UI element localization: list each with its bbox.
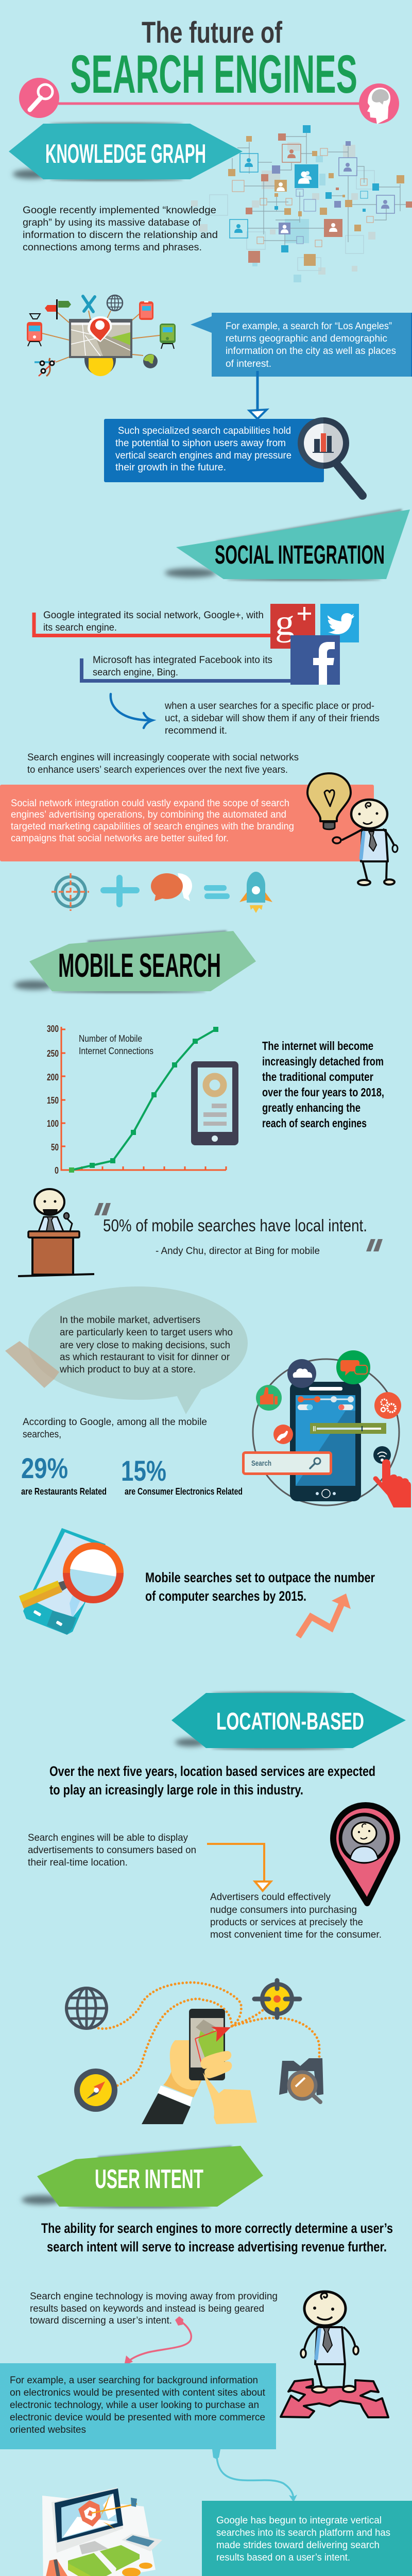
text: sidebar friends recommendation: uct, a sidebar will show them if any of their friends — [165, 713, 380, 724]
quote text: 50% of mobile searches have local intent. — [103, 1216, 367, 1235]
title underline with icons — [19, 78, 399, 124]
illustration: man with light bulb — [307, 773, 398, 885]
text: display ads on real-time location: Search engines will be able to display — [28, 1833, 188, 1843]
stat: 15 percent consumer electronics: 15% — [121, 1454, 166, 1487]
panel: electronics search example — [0, 2363, 276, 2449]
speech bubble: mobile market: which product to buy at a store. — [59, 1364, 196, 1375]
panel: electronics search example: oriented websites — [10, 2425, 86, 2435]
callout: Los Angeles example: For example, a search for “Los Angeles” — [226, 321, 392, 332]
text: internet detached from computer: greatly enhancing the — [262, 1101, 360, 1114]
callout: Los Angeles example: of interest. — [226, 359, 271, 369]
callout: specialized search capabilities — [104, 419, 324, 482]
panel: vertical search integration: made strides toward delivering search — [216, 2540, 380, 2551]
illustration: computer target with money — [42, 2487, 162, 2576]
banner: User Intent — [22, 2146, 263, 2208]
line chart: number of mobile internet connections: Internet Connections — [79, 1046, 153, 1056]
text: advertisers nudge consumers: most convenient time for the consumer. — [210, 1929, 382, 1940]
line chart: number of mobile internet connections: 200 — [47, 1072, 59, 1082]
text block: Google+ integration: Google integrated its social network, Google+, with — [43, 610, 264, 621]
text: internet detached from computer: reach of search engines — [262, 1116, 367, 1130]
text: according to Google — [23, 1417, 207, 1440]
text: mobile searches outpace computer — [145, 1570, 375, 1604]
panel: social network advertising: targeted marketing capabilities of search engines with the branding — [11, 821, 294, 832]
icon: phone with magnifying glass — [19, 1528, 124, 1635]
text block: Google+ integration: its search engine. — [43, 622, 117, 633]
text: display ads on real-time location: advertisements to consumers based on — [28, 1845, 196, 1856]
text: cooperate with social networks — [27, 752, 299, 775]
arrow: orange connector — [207, 1844, 271, 1891]
speech bubble: mobile market: as which restaurant to visit for dinner or — [60, 1352, 230, 1363]
arrow: curved blue — [111, 694, 152, 728]
banner: Knowledge Graph: KNOWLEDGE GRAPH — [45, 139, 206, 169]
icon cluster: map with transport icons — [27, 295, 176, 376]
text: mobile searches outpace computer: of computer searches by 2015. — [145, 1588, 306, 1604]
panel: electronics search example: on electronics would be presented with content sites about — [10, 2387, 266, 2398]
text: moving away from keywords: Search engine technology is moving away from providing — [30, 2291, 278, 2302]
icon: location pin with person — [333, 1805, 397, 1903]
text: advertisers nudge consumers: nudge consumers into purchasing — [210, 1905, 357, 1916]
text: sidebar friends recommendation: when a user searches for a specific place or prod- — [164, 701, 374, 711]
banner: Location-Based — [171, 1692, 406, 1750]
arrow: upward trend — [298, 1594, 351, 1637]
quote text: - Andy Chu, director at Bing for mobile — [156, 1246, 320, 1257]
stat: 15 percent consumer electronics — [121, 1454, 243, 1497]
callout: specialized search capabilities: their growth in the future. — [115, 462, 226, 473]
banner: User Intent: USER INTENT — [95, 2164, 203, 2194]
stat: 15 percent consumer electronics: are Consumer Electronics Related — [125, 1486, 243, 1497]
stat: 29 percent restaurants — [21, 1452, 107, 1497]
text: cooperate with social networks: Search engines will increasingly cooperate with social networks — [27, 752, 299, 763]
text: internet detached from computer: increasingly detached from — [262, 1055, 384, 1068]
callout: specialized search capabilities: vertical search engines and may pressure — [115, 450, 291, 461]
arrow: callout to specialized search — [249, 371, 267, 419]
speech bubble: mobile market: are particularly keen to target users who — [60, 1327, 233, 1338]
icons: Google plus, Twitter, Facebook — [270, 602, 359, 685]
text: display ads on real-time location: their real-time location. — [28, 1857, 128, 1868]
line chart: number of mobile internet connections: 0 — [55, 1165, 59, 1176]
quote marks — [94, 1203, 383, 1251]
equation icons: target plus social equals rocket — [52, 872, 272, 913]
text: cooperate with social networks: to enhance users’ search experiences over the next five years. — [27, 765, 288, 775]
text: moving away from keywords: results based on keywords and instead is being geared — [30, 2303, 264, 2314]
banner: Mobile Search: MOBILE SEARCH — [58, 946, 221, 984]
callout: Los Angeles example: information on the city as well as places — [226, 346, 396, 357]
illustration: man standing on direction arrows — [281, 2292, 388, 2417]
text: location based services intro: to play an icreasingly large role in this industry. — [49, 1782, 303, 1798]
illustration: phone navigation with connected icons — [66, 1980, 323, 2124]
text: sidebar friends recommendation: recommend it. — [165, 725, 227, 736]
line chart: number of mobile internet connections: 300 — [47, 1024, 59, 1034]
icon: smartphone — [191, 1061, 238, 1145]
arrow: pink curved — [124, 2316, 191, 2366]
panel: electronics search example: electronic technology, while a user looking to purchase an — [10, 2400, 259, 2411]
text: knowledge graph intro: graph” by using its massive database of — [23, 217, 201, 228]
banner: Mobile Search — [14, 931, 256, 993]
title: The future of: The future of — [142, 16, 283, 49]
line chart: number of mobile internet connections — [47, 1024, 226, 1176]
text: location based services intro — [49, 1764, 375, 1798]
text: moving away from keywords: toward discerning a user’s intent. — [30, 2315, 172, 2326]
icon: magnifier with bar chart — [298, 417, 363, 496]
speech bubble: mobile market — [5, 1286, 248, 1414]
callout: Los Angeles example — [191, 313, 412, 377]
text: internet detached from computer — [262, 1039, 384, 1130]
text: advertisers nudge consumers — [210, 1892, 382, 1940]
panel: social network advertising: campaigns that social networks are better suited for. — [11, 833, 229, 844]
callout: Los Angeles example: returns geographic and demographic — [226, 333, 387, 344]
quote text — [103, 1216, 367, 1257]
speech bubble: mobile market: In the mobile market, advertisers — [60, 1315, 200, 1326]
panel: electronics search example: electronic device would be presented with more commerce — [10, 2412, 265, 2423]
panel: electronics search example: For example, a user searching for background information — [10, 2375, 258, 2386]
arrow: teal curved — [212, 2449, 297, 2502]
banner: Social Integration — [165, 510, 410, 581]
text block: Microsoft Bing integration — [81, 655, 290, 681]
text: advertisers nudge consumers: products or services at precisely the — [210, 1917, 363, 1928]
speech bubble: mobile market: are very close to making decisions, such — [60, 1340, 230, 1351]
callout: specialized search capabilities: the potential to siphon users away from — [115, 438, 286, 449]
text: according to Google: According to Google, among all the mobile — [23, 1417, 207, 1428]
panel: vertical search integration — [202, 2501, 412, 2576]
banner: Knowledge Graph — [9, 123, 243, 181]
panel: vertical search integration: results based on a user’s intent. — [216, 2552, 350, 2563]
panel: social network advertising — [0, 785, 374, 861]
illustration: smartphone with app icons — [243, 1350, 411, 1507]
text: internet detached from computer: the traditional computer — [262, 1070, 373, 1083]
network graph illustration — [191, 125, 412, 282]
text: knowledge graph intro — [23, 205, 218, 253]
text: search intent drives revenue — [41, 2221, 393, 2255]
text: internet detached from computer: The internet will become — [262, 1039, 373, 1053]
text: sidebar friends recommendation — [164, 701, 380, 736]
panel: social network advertising: Social network integration could vastly expand the scope of search — [11, 798, 289, 809]
text: knowledge graph intro: connections among terms and phrases. — [23, 242, 202, 253]
text block: Google+ integration — [34, 610, 270, 636]
line chart: number of mobile internet connections: 150 — [47, 1095, 59, 1106]
panel: social network advertising: engines’ advertising operations, by combining the automated and — [11, 809, 286, 820]
line chart: number of mobile internet connections: 250 — [47, 1048, 59, 1059]
line chart: number of mobile internet connections: Number of Mobile — [79, 1033, 142, 1044]
panel: vertical search integration: Google has begun to integrate vertical — [216, 2515, 382, 2526]
text: internet detached from computer: over the four years to 2018, — [262, 1086, 384, 1099]
text: according to Google: searches, — [23, 1429, 61, 1440]
text: display ads on real-time location — [28, 1833, 196, 1868]
stat: 29 percent restaurants: are Restaurants Related — [21, 1486, 107, 1497]
line chart: number of mobile internet connections: 50 — [51, 1142, 59, 1153]
text block: Microsoft Bing integration: search engine, Bing. — [93, 667, 178, 678]
line chart: number of mobile internet connections: 100 — [47, 1118, 59, 1129]
panel: vertical search integration: searches into its search platform and has — [216, 2528, 390, 2538]
text: advertisers nudge consumers: Advertisers could effectively — [210, 1892, 331, 1903]
illustration: speaker at podium — [18, 1189, 94, 1276]
callout: specialized search capabilities: Such specialized search capabilities hold — [118, 426, 291, 436]
illustration: smartphone with app icons: Search — [251, 1459, 271, 1468]
text block: Microsoft Bing integration: Microsoft has integrated Facebook into its — [93, 655, 272, 666]
text: knowledge graph intro: information to discern the relationship and — [23, 230, 218, 241]
text: moving away from keywords — [30, 2291, 278, 2326]
text: knowledge graph intro: Google recently implemented “knowledge — [23, 205, 216, 216]
icons: Google plus, Twitter, Facebook: g — [275, 602, 295, 643]
stat: 29 percent restaurants: 29% — [21, 1452, 68, 1484]
